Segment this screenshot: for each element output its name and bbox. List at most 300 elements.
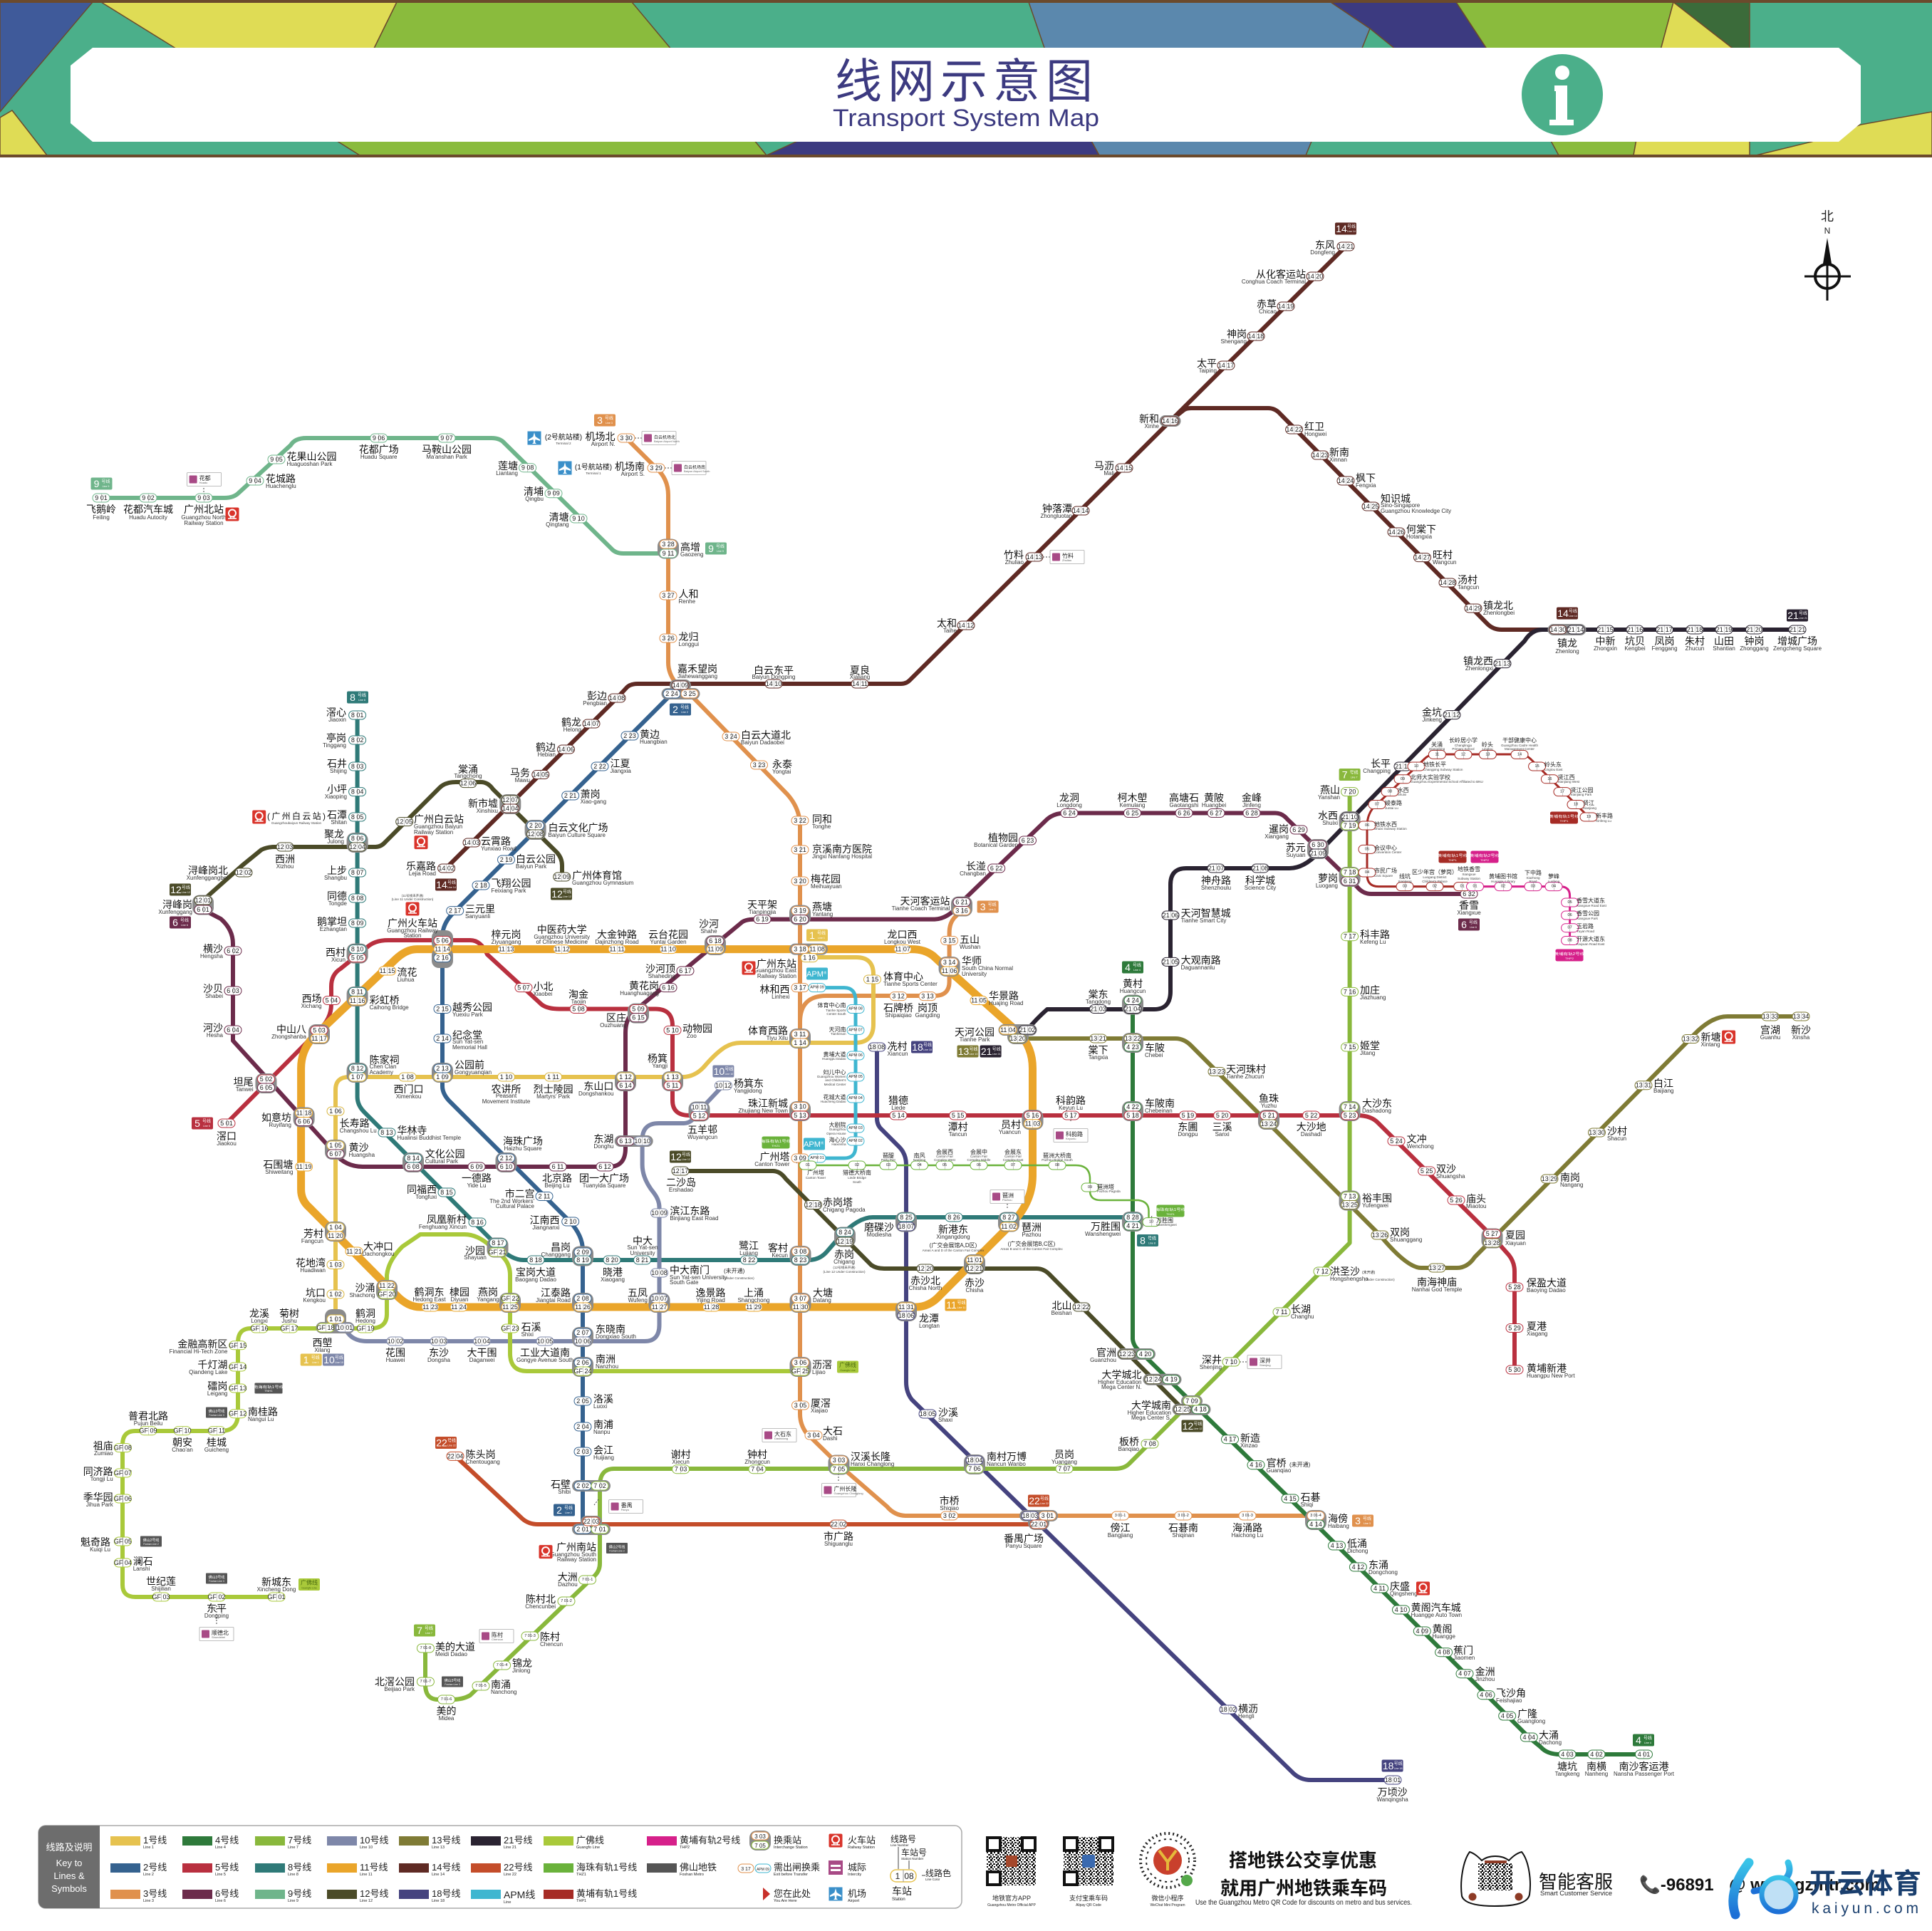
station pills: line 5: 5 24 <box>1390 1138 1403 1145</box>
station names: central west (old city): Guangzhou University <box>534 934 590 940</box>
station pills: line 6: 6 03 <box>227 987 239 994</box>
station names: central west (old city): Jiangtai Road <box>536 1297 571 1303</box>
legend: airport symbol: Airport <box>848 1899 860 1903</box>
line tags: 黄埔有轨2号线 <box>1554 952 1584 957</box>
station names: APM and THZ1: Canton Fair <box>936 1155 953 1158</box>
intercity rail boxes: Baiyun Airport North <box>654 439 680 443</box>
station pills: line 13: 13 25 <box>1341 1201 1358 1208</box>
station names: Guangfo and line 7 west: 南涌 <box>491 1679 511 1690</box>
station names: central north (Tianhe): South China Normal <box>962 965 1013 972</box>
station names: north-east (line 14, 21): Zhuliao <box>1005 559 1024 566</box>
station names: central west (old city): 东山口 <box>583 1081 613 1092</box>
station pills: line 12: 12 21 <box>967 1265 982 1272</box>
station names: central north (Tianhe): 黄村 <box>1123 978 1143 989</box>
line tags: 号线 <box>969 1046 978 1052</box>
legend: line swatches column 1: 1号线 <box>143 1835 167 1846</box>
legend: line swatches column 7: Guangfo Line <box>576 1846 600 1850</box>
station names: north-west (lines 9, 3 north, 14 south): 龙归 <box>678 631 698 642</box>
station names: central north (Tianhe): Tianhe Park <box>960 1036 990 1043</box>
station pills: line 2: 2 19 <box>500 856 512 863</box>
station names: Huangpu tram THP1 and THP2 <box>1374 737 1613 946</box>
station names: Guangfo and line 7 west: Midea <box>439 1715 455 1722</box>
header colour facets <box>0 0 1932 157</box>
station names: Guangfo and line 7 west: 沙涌 <box>355 1282 375 1294</box>
station pills: line 11: 11 03 <box>1025 1120 1040 1128</box>
station names: north-west (lines 9, 3 north, 14 south): Airport S. <box>621 471 645 477</box>
station names: Huangpu tram THP1 and THP2: Civic Square <box>1374 874 1393 878</box>
station names: north-east (line 14, 21): Dongfeng <box>1310 249 1335 256</box>
station pills: line 9: 9 06 <box>373 434 385 442</box>
station names: central west (old city): Baogang Dadao <box>515 1276 556 1283</box>
station names: south (Panyu): 沥滘 <box>812 1359 832 1370</box>
station pills: line 5: 5 17 <box>1064 1112 1077 1119</box>
station pills: line 14: 14 16 <box>1162 417 1178 425</box>
station names: central west (old city): 白云文化广场 <box>549 822 608 833</box>
station pills: line 2: 2 23 <box>623 732 636 739</box>
line tags: 7 <box>417 1625 422 1636</box>
station pills: line 8: 8 18 <box>529 1256 542 1264</box>
legend title block: Lines & <box>53 1870 85 1881</box>
station names: APM and THZ1: 会展西 <box>936 1148 953 1155</box>
station names: APM and THZ1: Complex Middle <box>967 1158 991 1162</box>
station pills: line 7: 7 07 <box>1058 1465 1071 1472</box>
line tags: 号线 <box>1133 962 1141 968</box>
intercity rail boxes: 顺德北 <box>212 1629 229 1636</box>
station names: north-east (line 14, 21) <box>937 239 1822 774</box>
station names: south (Panyu): Tangkeng <box>1555 1771 1579 1777</box>
station names: central north (Tianhe): 员村 <box>1001 1119 1021 1130</box>
line tags: 13 <box>958 1046 969 1057</box>
legend: intercity symbol: Intercity <box>848 1873 862 1877</box>
station pills: line 7: 7 18 <box>1344 869 1356 876</box>
station pills: line 7: 7 11 <box>1276 1308 1287 1316</box>
station names: east (lines 6, 7, 13, 5): 双沙 <box>1436 1163 1456 1175</box>
station names: north-west (lines 9, 3 north, 14 south): Jiangxia <box>610 768 631 774</box>
station names: north-west (lines 9, 3 north, 14 south): Terminal 1 <box>586 472 601 475</box>
station names: central west (old city): Haizhu Square <box>504 1145 542 1152</box>
station pills: line 8: 8 13 <box>380 1129 393 1136</box>
station names: central west (old city): 棠涌 <box>458 764 478 775</box>
line tags: THZ1 <box>772 1145 781 1147</box>
station names: north-west (lines 9, 3 north, 14 south): 黄边 <box>640 729 660 740</box>
station pills: line 11: 11 12 <box>554 946 570 953</box>
station names: central north (Tianhe): 冼村 <box>888 1041 908 1052</box>
station names: central north (Tianhe): 琶洲 <box>1022 1222 1042 1233</box>
station pills: APM: APM 04 <box>848 1096 863 1100</box>
line tags: 14 <box>1336 223 1347 234</box>
station names: Guangfo and line 7 west: 祖庙 <box>93 1440 113 1452</box>
line tags: 12 <box>670 1151 682 1162</box>
line tags: 3 <box>1355 1515 1361 1526</box>
line tags: 号线 <box>182 885 190 890</box>
station names: south (Panyu): Hanxi Changlong <box>851 1461 894 1467</box>
legend: intercity symbol <box>829 1860 866 1877</box>
station names: central west (old city): Ziyuangang <box>492 939 521 945</box>
station names: central north (Tianhe): 长湴 <box>966 860 986 872</box>
station names: Guangfo and line 7 west: Shijilian <box>151 1586 171 1592</box>
legend: you are here symbol: You Are Here <box>774 1899 797 1903</box>
station names: central north (Tianhe): Areas B and C of the Canton Fair Complex <box>1000 1247 1063 1251</box>
station names: central west (old city): (Line 11 Under Construction) <box>392 897 434 901</box>
station names: central north (Tianhe): Yuancun <box>999 1129 1021 1135</box>
line tags: 号线 <box>1193 1421 1203 1427</box>
station pills: THP2: 03 <box>1531 885 1535 889</box>
station pills: line 7: 7 13 <box>1344 1192 1356 1199</box>
station names: south (Panyu): 石碁 <box>1301 1492 1321 1503</box>
station names: north-east (line 14, 21): Fengxia <box>1356 482 1376 489</box>
station names: east (lines 6, 7, 13, 5): 大沙东 <box>1362 1098 1392 1109</box>
station pills: line 11: 11 17 <box>311 1035 327 1042</box>
intercity rail boxes: Shenjing <box>1260 1363 1271 1367</box>
station names: east (lines 6, 7, 13, 5): Luogang <box>1316 883 1338 889</box>
station pills: line 12: 12 03 <box>277 843 293 850</box>
station names: APM and THZ1: Huangpu Dadao <box>822 1057 846 1061</box>
station pills: line 8: 8 09 <box>351 920 363 927</box>
station names: APM and THZ1: Guangzhou <box>829 1128 846 1131</box>
airport icons <box>527 432 571 474</box>
station pills: line 13: 13 23 <box>1209 1068 1225 1076</box>
station names: east (lines 6, 7, 13, 5): Jinfeng <box>1242 802 1261 808</box>
station names: Huangpu tram THP1 and THP2: 贤江公园 <box>1570 787 1593 793</box>
station names: Guangfo and line 7 west: Qiandeng Lake <box>189 1369 228 1375</box>
station pills: line 5: 5 02 <box>260 1076 272 1083</box>
station names: central north (Tianhe): Daguannanlu <box>1181 964 1215 971</box>
station names: south (Panyu): 东涌 <box>1368 1559 1388 1571</box>
station pills: line 14: 14 17 <box>1218 362 1234 369</box>
station names: north-east (line 14, 21): Zhucun <box>1686 645 1704 652</box>
station pills: line 8: 8 25 <box>900 1214 913 1221</box>
station names: central west (old city): 公园前 <box>455 1059 484 1071</box>
station names: central north (Tianhe): 北山 <box>1051 1300 1071 1311</box>
station names: Huangpu tram THP1 and THP2: Xiangxue Road East <box>1577 904 1607 907</box>
station names: Guangfo and line 7 west: 南桂路 <box>248 1406 278 1417</box>
station pills: line 5: 5 08 <box>572 1006 585 1013</box>
station names: central west (old city): 广州白云站 <box>414 813 464 825</box>
legend: line swatches column 4: 10号线 <box>360 1835 388 1846</box>
station names: Guangfo and line 7 west: Xilang <box>314 1347 331 1353</box>
station pills: line 3: 3 12 <box>892 993 905 1000</box>
station names: north-east (line 14, 21): 凤岗 <box>1654 635 1674 647</box>
station names: central north (Tianhe): Wanshengwei <box>1085 1231 1121 1237</box>
station pills: line 7: 7 01-2 <box>561 1599 572 1603</box>
line tags: 21 <box>981 1046 992 1057</box>
text: website: @ www.gzmtr.com <box>1729 1875 1880 1895</box>
station pills: line 4: 4 03 <box>1561 1751 1574 1758</box>
station names: east (lines 6, 7, 13, 5): Shuangsha <box>1436 1173 1465 1180</box>
station names: Guangfo and line 7 west: Jushu <box>281 1318 297 1324</box>
line tags: Line 2 <box>681 711 688 714</box>
station pills: line 5 <box>218 936 1523 1374</box>
station names: Guangfo and line 7 west: 陈头岗 <box>466 1449 496 1460</box>
station names: Guangfo and line 7 west: Yangang <box>477 1296 499 1303</box>
intercity rail boxes: Dashidong <box>774 1437 788 1440</box>
line: 6 <box>203 813 1469 1167</box>
station pills: line 4: 4 17 <box>1224 1436 1236 1443</box>
station names: Guangfo and line 7 west: 澜石 <box>133 1556 153 1567</box>
line tags: 号线 <box>202 1118 211 1124</box>
station pills: line 1: 1 08 <box>401 1073 414 1081</box>
station pills: line 5: 5 03 <box>313 1027 326 1034</box>
station pills: line 9: 9 07 <box>440 434 453 442</box>
station names: central west (old city): Zhongshanba <box>271 1034 307 1040</box>
line tags: Line 8 <box>1148 1242 1155 1245</box>
station names: central west (old city): 浔峰岗 <box>162 899 192 910</box>
station names: central west (old city): Xiaoping <box>325 793 347 800</box>
station names: Guangfo and line 7 west: Beijiao Park <box>384 1686 415 1692</box>
station pills: line 11: 11 24 <box>451 1303 467 1311</box>
line tags: 9 <box>708 543 714 554</box>
station names: central west (old city): 同德 <box>327 890 347 902</box>
station names: north-west (lines 9, 3 north, 14 south): Huadu Autocity <box>129 514 167 521</box>
station pills: line 7: 7 12 <box>1316 1268 1329 1275</box>
station names: central west (old city): 团一大广场 <box>579 1172 629 1184</box>
station names: central north (Tianhe): 广州东站 <box>757 958 796 969</box>
station pills: line 8: 8 05 <box>351 813 363 821</box>
icon: smart customer service mascot <box>1461 1852 1530 1906</box>
station pills: THP2: 06 <box>1568 913 1572 917</box>
station names: east (lines 6, 7, 13, 5): Suyuan <box>1286 852 1306 858</box>
station pills: line 8: 8 21 <box>636 1256 648 1264</box>
line tags: Guangfo Line <box>840 1369 856 1372</box>
station names: east (lines 6, 7, 13, 5): (未开通) <box>1362 1270 1376 1275</box>
station names: south (Panyu): Shenjing <box>1200 1364 1222 1370</box>
station names: Guangfo and line 7 west: Nanchong <box>491 1689 516 1695</box>
station pills: line 3: 3 01-2 <box>1178 1514 1189 1518</box>
station names: central west (old city): (广州白云站) <box>267 811 326 821</box>
station pills: line 7: 7 16 <box>1344 988 1356 995</box>
station names: Guangfo and line 7 west: 北滘公园 <box>375 1676 415 1687</box>
station names: Guangfo and line 7 west: 坑口 <box>306 1287 326 1298</box>
station pills: line 13: 13 26 <box>1372 1232 1388 1239</box>
station names: central west (old city): Shangbu <box>324 875 347 881</box>
station pills: line 4: 4 15 <box>1284 1495 1297 1502</box>
station pills: Guangfo line: GF 22 <box>501 1295 519 1302</box>
station names: central north (Tianhe): 珠江新城 <box>748 1098 788 1109</box>
station names: central west (old city): Tinggang <box>323 742 346 749</box>
station names: central west (old city): Huangsha <box>349 1152 375 1158</box>
station pills: line 10: 10 11 <box>692 1104 707 1111</box>
station names: north-west (lines 9, 3 north, 14 south): 鹤边 <box>536 741 556 753</box>
station names: south (Panyu): (未开通) <box>1289 1461 1311 1468</box>
station pills: line 4: 4 13 <box>1331 1542 1343 1549</box>
station names: east (lines 6, 7, 13, 5): 沙村 <box>1607 1125 1627 1137</box>
station names: central west (old city): 如意坊 <box>261 1112 291 1123</box>
station pills: line 3: 3 02 <box>943 1512 955 1519</box>
station names: Huangpu tram THP1 and THP2: Lingtou <box>1482 747 1493 751</box>
station names: south (Panyu): Jiaomen <box>1453 1655 1475 1661</box>
station names: APM and THZ1: Huacheng Dadao <box>821 1100 846 1103</box>
station pills: THP2 <box>1466 883 1579 944</box>
station names: south (Panyu): 海傍 <box>1328 1513 1348 1524</box>
station names: north-east (line 14, 21): 镇龙北 <box>1483 600 1513 611</box>
station names: central west (old city): 彩虹桥 <box>370 994 400 1006</box>
station pills: line 6: 6 07 <box>329 1150 342 1157</box>
station names: central west (old city): 越秀公园 <box>452 1001 492 1013</box>
legend: line swatches column 4: 11号线 <box>360 1862 388 1873</box>
station pills: line 14: 14 25 <box>1363 503 1378 510</box>
station names: APM and THZ1: 会展东 <box>1004 1148 1022 1155</box>
station names: south (Panyu): 黄阁汽车城 <box>1411 1602 1461 1613</box>
station names: central north (Tianhe): Longkou West <box>884 939 921 945</box>
station pills: APM: APM 06 <box>848 1053 863 1058</box>
station names: central west (old city): 沙河顶 <box>645 963 675 974</box>
station names: central west (old city): Shabei <box>205 993 223 999</box>
station pills: line 6: 6 28 <box>1245 809 1258 816</box>
station pills: line 12: 12 05 <box>396 818 412 826</box>
station pills: line 11 <box>296 945 1042 1311</box>
station pills: line 2: 2 02 <box>576 1482 589 1489</box>
station pills: line 5: 5 23 <box>1344 1112 1356 1119</box>
station pills: line 1: 1 01 <box>329 1316 342 1323</box>
line tags: 18 <box>1383 1760 1394 1771</box>
station names: central west (old city): Luoxi <box>593 1403 607 1410</box>
station pills: line 2: 2 20 <box>529 822 541 829</box>
station names: central west (old city): 昌岗 <box>551 1242 571 1253</box>
line: THP2 tram <box>1475 887 1570 940</box>
station pills: line 4 <box>1124 996 1653 1759</box>
station names: Huangpu tram THP1 and THP2: 峻泰路 <box>1385 799 1402 806</box>
station names: central west (old city): 洛溪 <box>593 1393 613 1405</box>
line tags: Line 10 <box>335 1361 343 1364</box>
legend: line swatches column 3: Line 8 <box>288 1873 298 1877</box>
QR code: official app: Guangzhou Metro Official APP <box>987 1903 1037 1907</box>
station pills: line 21: 21 14 <box>1568 626 1584 633</box>
station names: central north (Tianhe): Xingangdong <box>936 1234 970 1240</box>
station pills: line 13: 13 31 <box>1636 1082 1651 1089</box>
station pills: THZ1: 07 <box>1011 1163 1015 1167</box>
line tags: 黄埔有轨1号线 <box>1438 853 1468 858</box>
station names: north-west (lines 9, 3 north, 14 south): Huadu Square <box>360 454 398 460</box>
station names: Huangpu tram THP1 and THP2: 地铁香雪 <box>1458 865 1480 873</box>
station names: south (Panyu): Xiajiao <box>811 1407 829 1414</box>
intercity rail boxes: 番禺 <box>621 1501 633 1509</box>
station names: central west (old city): 凤凰新村 <box>427 1214 467 1225</box>
station names: Guangfo and line 7 west: Chencunbei <box>525 1603 556 1610</box>
station names: south (Panyu): Wanqingsha <box>1377 1796 1408 1803</box>
station names: Guangfo and line 7 west: Kengkou <box>303 1297 326 1303</box>
station names: north-east (line 14, 21): 马沥 <box>1094 460 1114 472</box>
station pills: line 5: 5 18 <box>1126 1112 1139 1119</box>
station pills: line 2: 2 05 <box>576 1397 589 1405</box>
station names: north-west (lines 9, 3 north, 14 south): 白云大道北 <box>741 729 791 741</box>
station pills: line 1: 1 12 <box>619 1073 632 1081</box>
line tags: Line 6 <box>1470 926 1477 929</box>
station names: central north (Tianhe): Meihuayuan <box>811 883 842 890</box>
station names: central west (old city): Shiweitang <box>265 1169 293 1175</box>
legend: line swatches column 6 <box>471 1835 535 1905</box>
QR code: WeChat mini program <box>1141 1833 1195 1907</box>
station names: north-west (lines 9, 3 north, 14 south): 马务 <box>510 767 530 779</box>
station pills: line 12 <box>194 779 1191 1414</box>
legend: interchange symbol: Interchange Station <box>774 1846 808 1850</box>
station pills: line 3: 3 15 <box>943 937 955 944</box>
station names: central west (old city): 长寿路 <box>340 1118 370 1129</box>
station names: central north (Tianhe): Shenzhoulu <box>1201 885 1231 891</box>
station names: south (Panyu): 横沥 <box>1238 1703 1258 1714</box>
station pills: line 8 <box>349 711 1141 1264</box>
station pills: line 2: 2 13 <box>436 1065 449 1072</box>
station names: south (Panyu): Dachong <box>1539 1739 1562 1746</box>
station pills: Guangfo line: GF 03 <box>152 1593 170 1601</box>
station names: central north (Tianhe): 赤沙 <box>965 1277 985 1289</box>
station names: central north (Tianhe): Tangdong <box>1086 999 1111 1005</box>
station pills: line 6: 6 05 <box>260 1084 272 1091</box>
station pills: APM: APM 08 <box>848 1007 863 1011</box>
line tags: 10 <box>714 1066 724 1077</box>
station names: Huangpu tram THP1 and THP2: 市民广场 <box>1374 867 1397 874</box>
station names: north-west (lines 9, 3 north, 14 south): 白云东平 <box>754 665 794 676</box>
station names: central west (old city): Ouzhuang <box>600 1022 626 1029</box>
station pills: line 9: 9 04 <box>249 477 261 484</box>
station pills: line 4: 4 11 <box>1373 1585 1386 1592</box>
station pills: Guangfo line: GF 01 <box>267 1593 286 1601</box>
station names: central west (old city): 杨箕东 <box>734 1078 764 1089</box>
station pills: line 3: 3 01-4 <box>1310 1514 1321 1518</box>
station names: south (Panyu): 南横 <box>1586 1761 1606 1772</box>
station names: central west (old city): 华林寺 <box>397 1125 427 1136</box>
legend: line swatches column 2 <box>182 1835 239 1903</box>
station names: central north (Tianhe): 潭村 <box>948 1121 968 1133</box>
station pills: line 11: 11 04 <box>1000 1026 1016 1034</box>
station pills: line 21: 21 02 <box>1019 1026 1035 1034</box>
station pills: THP2: 05 <box>1568 900 1572 905</box>
station pills: line 21: 21 05 <box>1163 958 1178 965</box>
station names: central west (old city): 江泰路 <box>541 1287 571 1298</box>
promo text: 就用广州地铁乘车码 <box>1220 1878 1387 1899</box>
station names: east (lines 6, 7, 13, 5): 水西 <box>1318 810 1338 821</box>
station names: north-east (line 14, 21): Kengbei <box>1624 645 1646 652</box>
station pills: line 18: 18 07 <box>898 1223 914 1230</box>
legend: line swatches column 1: 2号线 <box>143 1862 167 1873</box>
station pills: line 1: 1 09 <box>436 1073 449 1081</box>
station names: central west (old city): Tanwei <box>236 1086 254 1093</box>
station names: north-east (line 14, 21): 山田 <box>1714 635 1734 647</box>
station names: north-west (lines 9, 3 north, 14 south): Mawu <box>515 777 530 784</box>
station names: central west (old city): 中大 <box>633 1235 653 1246</box>
station names: Guangfo and line 7 west: 棣园 <box>450 1286 469 1298</box>
station pills: THZ1: 01 <box>806 1163 810 1167</box>
station pills: line 2: 2 08 <box>576 1295 589 1302</box>
legend: airport symbol <box>829 1888 866 1903</box>
line tags: Line 7 <box>425 1632 432 1635</box>
station pills: line 12: 12 04 <box>349 843 365 850</box>
line tags: 号线 <box>724 1066 733 1072</box>
line tags: 号线 <box>101 479 110 484</box>
station names: south (Panyu): 蕉门 <box>1453 1645 1473 1656</box>
line tags: Line 12 <box>682 1158 690 1161</box>
station names: north-west (lines 9, 3 north, 14 south): Gaozeng <box>680 551 703 558</box>
station names: central north (Tianhe): Liede <box>891 1105 905 1111</box>
station names: Guangfo and line 7 west: 广州南站 <box>556 1541 596 1553</box>
station names: east (lines 6, 7, 13, 5): 庙头 <box>1466 1193 1486 1204</box>
station names: APM and THZ1 <box>806 1001 1177 1227</box>
station pills: line 14: 14 28 <box>1440 579 1455 586</box>
legend: line swatches column 3: Line 9 <box>288 1899 298 1903</box>
legend: line swatches column 5: Line 18 <box>432 1899 445 1903</box>
station pills: line 3: 3 08 <box>794 1248 806 1255</box>
station pills: Guangfo line: GF 08 <box>114 1445 132 1452</box>
station names: north-east (line 14, 21): Zhongxin <box>1594 645 1617 652</box>
station names: central west (old city): 东晓南 <box>596 1323 625 1335</box>
station pills: line 7: 7 08 <box>1143 1440 1156 1447</box>
station pills: THP1: 03 <box>1403 885 1407 889</box>
station pills: line 6: 6 15 <box>632 1014 645 1021</box>
station pills: line 12: 12 24 <box>1146 1376 1161 1383</box>
station names: central west (old city): Shibi <box>558 1489 571 1495</box>
station names: central west (old city): Dajinzhong Road <box>595 939 639 945</box>
station pills: APM <box>809 984 864 1162</box>
station names: south (Panyu): Higher Education <box>1098 1379 1141 1385</box>
